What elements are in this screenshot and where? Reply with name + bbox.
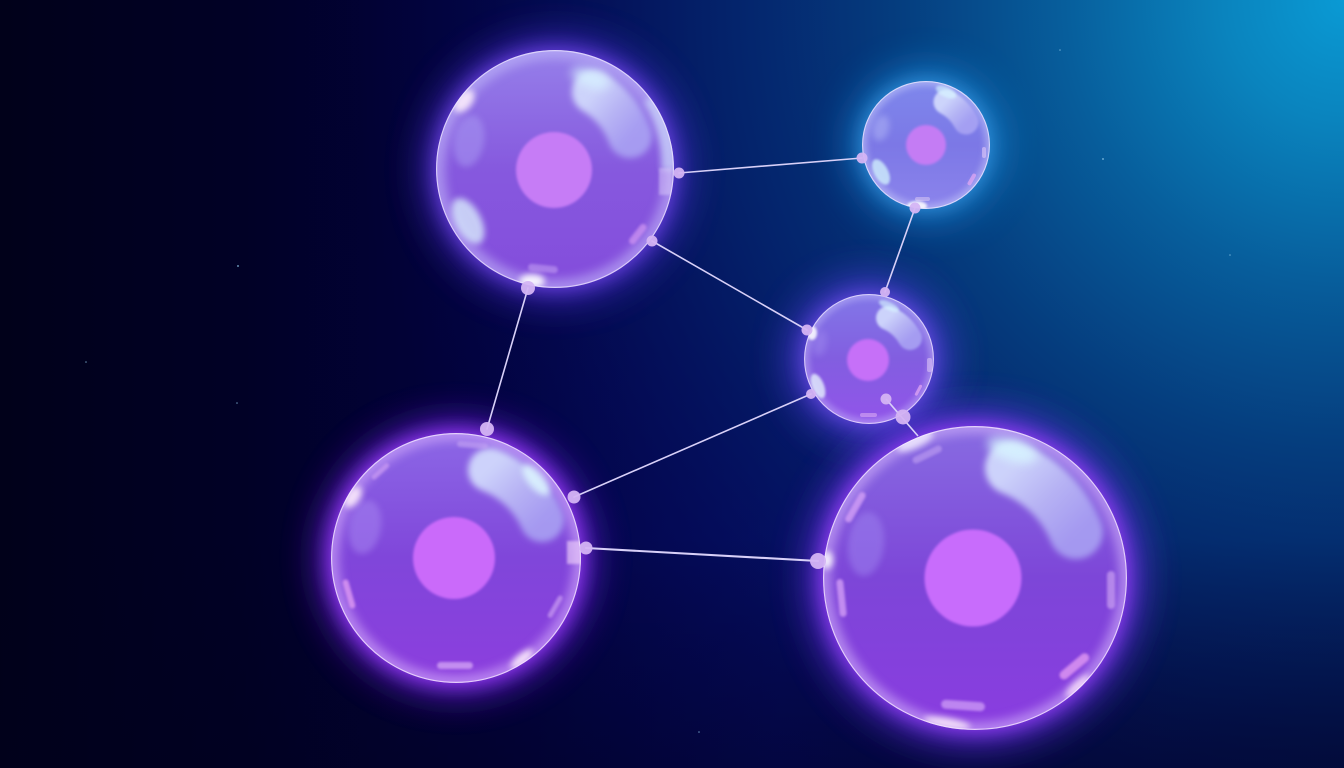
sphere interior details — [436, 50, 674, 288]
sphere: bottom right — [821, 426, 1127, 732]
core — [847, 339, 889, 381]
sphere: bottom left — [331, 433, 581, 683]
background star specks — [85, 49, 1231, 733]
sphere interior details — [862, 81, 990, 211]
sphere interior details — [331, 433, 581, 683]
connector across middle and large sphere — [886, 399, 918, 436]
sphere: top left — [436, 50, 674, 288]
sphere: top right — [862, 81, 990, 211]
core — [413, 517, 495, 599]
connector lines — [487, 158, 915, 561]
sphere: middle — [804, 294, 934, 424]
sphere interior details — [804, 294, 934, 424]
core — [906, 125, 946, 165]
connector nodes — [480, 152, 920, 569]
sphere interior details — [821, 426, 1127, 732]
sphere glows — [322, 41, 1139, 742]
core — [516, 132, 592, 208]
core — [924, 530, 1022, 626]
